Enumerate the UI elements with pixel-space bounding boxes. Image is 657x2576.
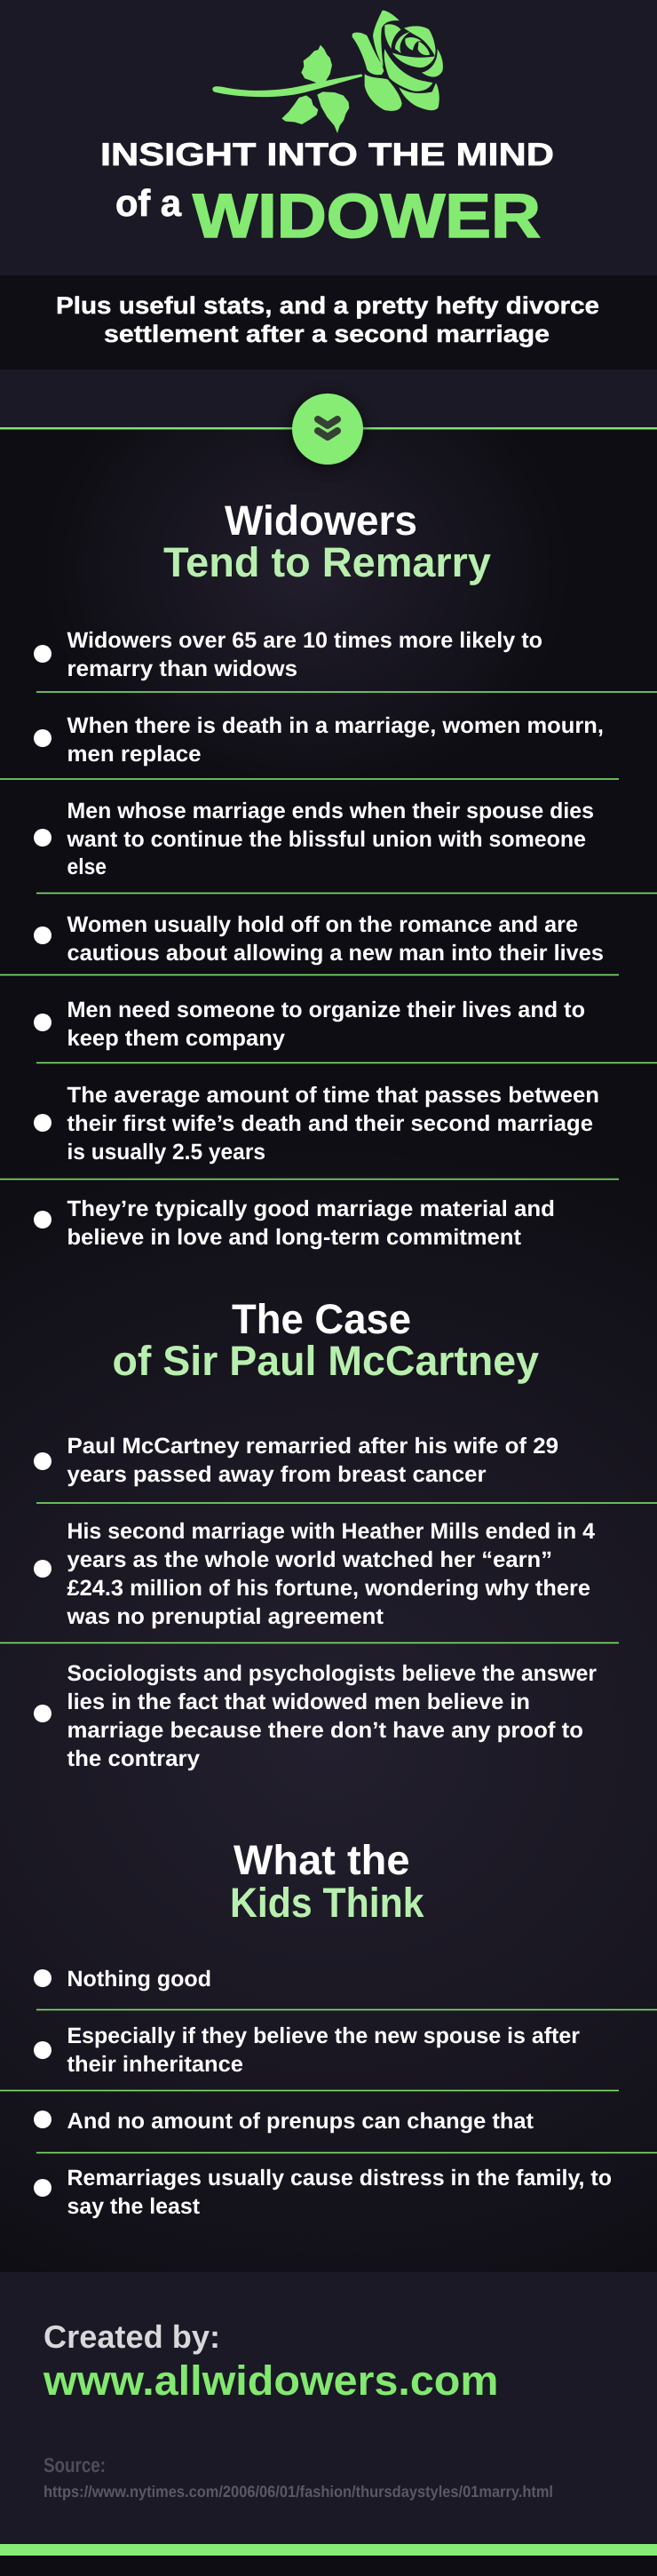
divider with chevron button — [0, 394, 657, 468]
item 2 — [34, 2023, 580, 2077]
item 4 — [34, 2166, 612, 2219]
icon: green rose — [212, 11, 443, 133]
item 6: The average amount of time that passes between — [67, 1083, 599, 1108]
bottom green bar — [0, 2544, 657, 2556]
subtitle text: Plus useful stats, and a pretty hefty divorce — [56, 292, 599, 319]
item 3 — [34, 799, 594, 879]
item 3: else — [67, 855, 107, 879]
section heading: What the Kids Think: Kids Think — [230, 1879, 424, 1926]
item 3: lies in the fact that widowed men believe in — [67, 1690, 530, 1714]
section heading: The Case of Sir Paul McCartney: of Sir Paul McCartney — [112, 1337, 539, 1384]
item 5 — [34, 998, 585, 1051]
subtitle text — [56, 292, 599, 347]
item 1: years passed away from breast cancer — [67, 1462, 487, 1487]
item 7: They’re typically good marriage material and — [67, 1197, 555, 1221]
item 6: their first wife’s death and their second marriage — [67, 1111, 593, 1136]
item 1: Paul McCartney remarried after his wife of 29 — [67, 1434, 558, 1459]
header panel — [0, 0, 657, 428]
subtitle text: settlement after a second marriage — [104, 321, 550, 347]
item 7 — [34, 1197, 555, 1250]
item 1 — [34, 1434, 558, 1487]
item 4: Remarriages usually cause distress in the family, to — [67, 2166, 612, 2190]
footer panel — [0, 2272, 657, 2544]
item 5: keep them company — [67, 1026, 285, 1051]
item 2 — [34, 1519, 595, 1629]
item 3: the contrary — [67, 1746, 200, 1771]
item 2: was no prenuptial agreement — [66, 1604, 384, 1629]
created by label: Created by: — [44, 2318, 220, 2355]
item 2: their inheritance — [67, 2052, 243, 2077]
item 3: Sociologists and psychologists believe the answer — [67, 1661, 597, 1686]
list: McCartney case — [0, 1434, 657, 1771]
section heading: The Case of Sir Paul McCartney — [112, 1295, 539, 1384]
item 6: is usually 2.5 years — [67, 1140, 265, 1165]
item 7: believe in love and long-term commitment — [67, 1225, 522, 1250]
website url: www.allwidowers.com — [43, 2357, 498, 2404]
item 2 — [34, 713, 604, 767]
item 2: years as the whole world watched her “earn” — [67, 1547, 552, 1572]
item 2: When there is death in a marriage, women mourn, — [67, 713, 604, 738]
section heading: What the Kids Think: What the — [234, 1836, 410, 1883]
section heading: Widowers Tend to Remarry: Widowers — [225, 497, 417, 544]
title: of a: of a — [115, 182, 182, 224]
item 2: men replace — [67, 742, 202, 767]
subtitle band — [0, 275, 657, 370]
item 4: say the least — [67, 2194, 201, 2219]
item 1: Widowers over 65 are 10 times more likely to — [67, 628, 542, 653]
section heading: Widowers Tend to Remarry — [163, 497, 491, 585]
list: kids — [0, 1967, 657, 2219]
item 4: cautious about allowing a new man into their lives — [67, 941, 604, 966]
item 2: His second marriage with Heather Mills ended in 4 — [67, 1519, 595, 1544]
title line: Insight into the mind: INSIGHT INTO THE MIND — [100, 136, 554, 172]
item 2: £24.3 million of his fortune, wondering why there — [67, 1576, 590, 1601]
list: remarry facts — [0, 628, 657, 1250]
item 1 — [34, 628, 542, 681]
item 3: marriage because there don’t have any proof to — [67, 1718, 583, 1743]
section heading: What the Kids Think — [230, 1836, 424, 1926]
item 3: And no amount of prenups can change that — [67, 2109, 534, 2134]
item 3: Men whose marriage ends when their spouse dies — [67, 799, 594, 823]
section heading: Widowers Tend to Remarry: Tend to Remarry — [163, 538, 491, 585]
section heading: The Case of Sir Paul McCartney: The Case — [232, 1295, 411, 1342]
item 4: Women usually hold off on the romance and are — [67, 912, 578, 937]
item 5: Men need someone to organize their lives and to — [67, 998, 585, 1022]
item 1: Nothing good — [67, 1967, 211, 1992]
item 1: remarry than widows — [67, 656, 297, 681]
source url: https://www.nytimes.com/2006/06/01/fashion/thursdaystyles/01marry.html — [44, 2483, 553, 2500]
source label: Source: — [44, 2453, 106, 2477]
item 4 — [34, 912, 604, 966]
title: Widower: WIDOWER — [193, 181, 541, 250]
item 2: Especially if they believe the new spouse is after — [67, 2023, 580, 2048]
item 6 — [34, 1083, 599, 1165]
item 3 — [34, 1661, 597, 1771]
item 3: want to continue the blissful union with someone — [67, 827, 586, 852]
icon: double chevron circle — [292, 394, 363, 465]
